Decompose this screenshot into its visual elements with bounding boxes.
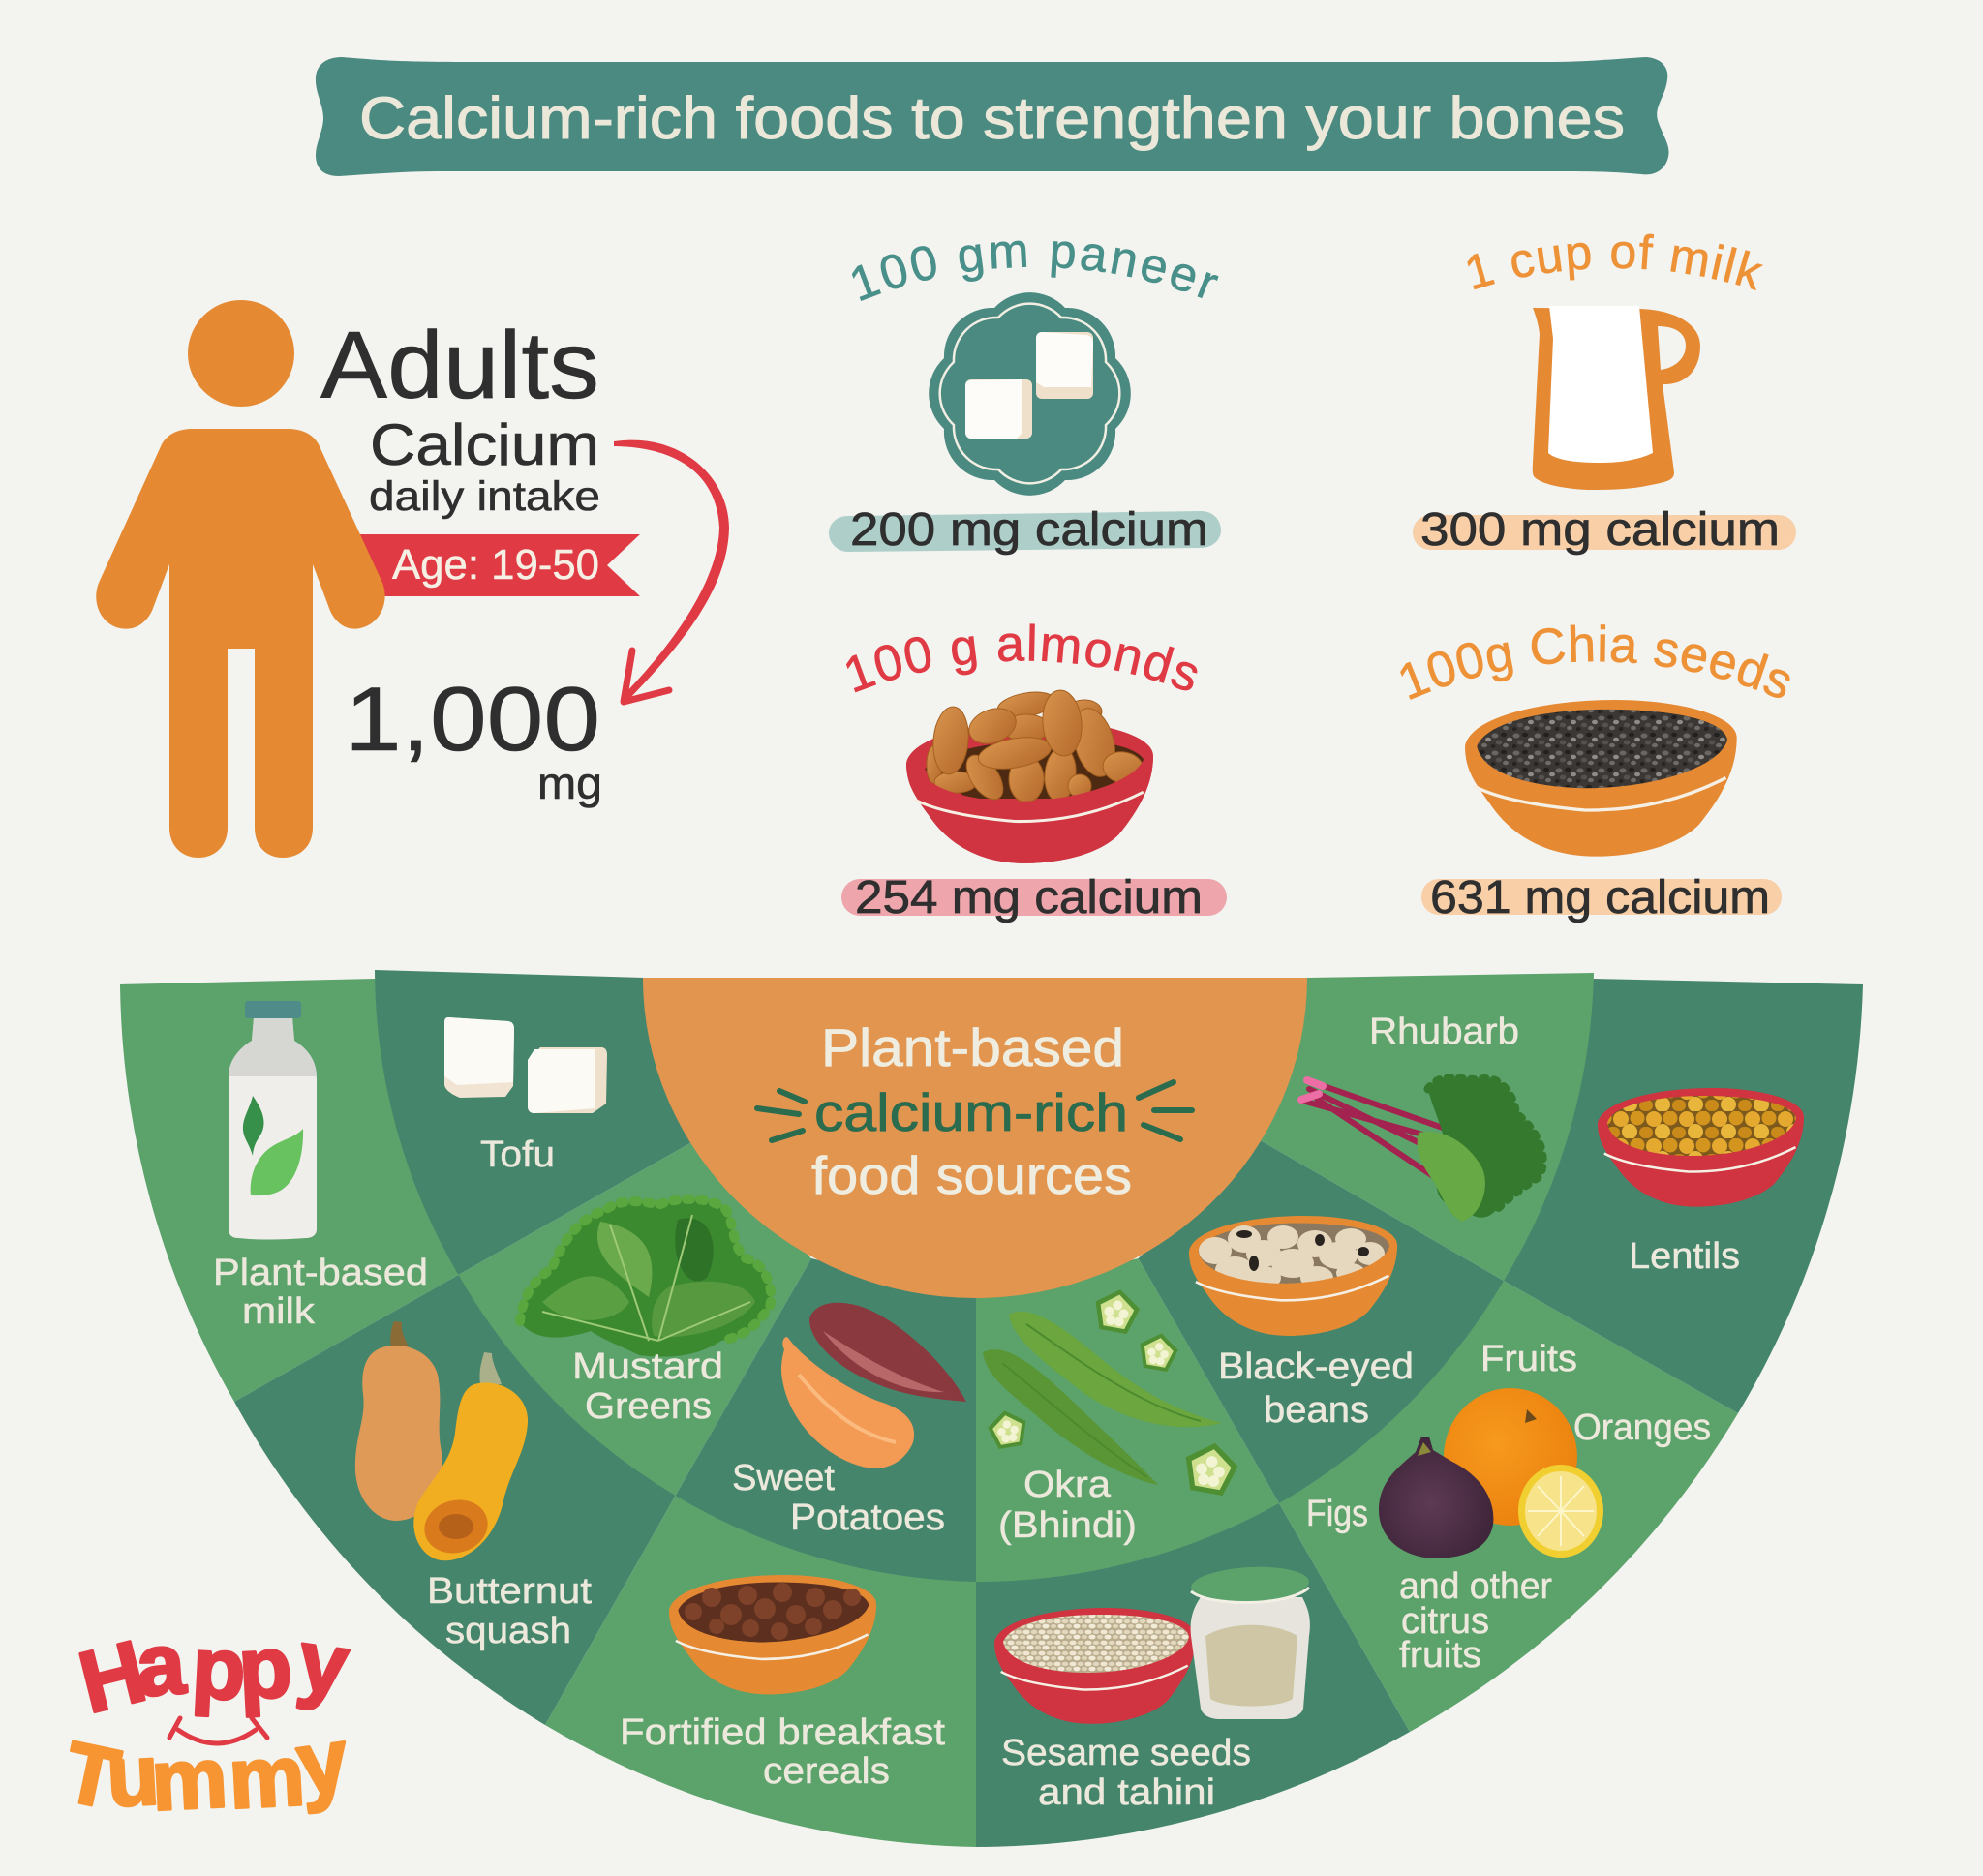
centre semicircle: food sources: [811, 1145, 1132, 1205]
arrow: [614, 440, 729, 702]
text: calcium: Calcium: [370, 412, 599, 477]
label: sweet potatoes: Potatoes: [790, 1498, 945, 1538]
icon: mustard greens: [520, 1199, 771, 1357]
logo word: tummy: m: [149, 1729, 229, 1829]
logo word: happy: y: [292, 1613, 354, 1715]
logo word: happy: a: [133, 1616, 189, 1715]
label: figs: Figs: [1306, 1494, 1368, 1534]
number: 1,000: 1,000: [345, 668, 600, 770]
label: butternut squash: Butternut: [427, 1571, 592, 1612]
label: fortified breakfast cereals: Fortified breakfast: [620, 1712, 945, 1753]
sector: tofu: [375, 970, 695, 1275]
label: mustard greens: Mustard: [572, 1346, 723, 1387]
label: and other citrus fruits: fruits: [1399, 1635, 1481, 1676]
label: lentils: Lentils: [1629, 1236, 1740, 1277]
icon: paneer plate: [929, 292, 1131, 496]
logo: happy tummy: [56, 1613, 354, 1829]
logo word: happy: p: [190, 1619, 248, 1719]
sector: butternut squash: [234, 1275, 676, 1725]
age ribbon: Age: 19-50: [392, 541, 599, 589]
sector: sweet potatoes: [676, 1258, 976, 1582]
curved label: 100 g almonds: [846, 623, 1197, 693]
label: fortified breakfast cereals: [620, 1712, 945, 1792]
logo word: tummy: T: [56, 1723, 127, 1828]
logo word: happy: H: [71, 1623, 155, 1732]
label: plant-based milk: Plant-based: [213, 1253, 428, 1293]
icon: butternut squash: [355, 1321, 528, 1560]
label: plant-based milk: [213, 1253, 428, 1332]
label: fruits: Fruits: [1480, 1339, 1577, 1379]
curved label: 1 cup of milk: [1467, 234, 1764, 290]
label: oranges: Oranges: [1573, 1407, 1711, 1448]
label: butternut squash: squash: [445, 1611, 571, 1651]
icon: bowl of cereal: [669, 1575, 876, 1694]
logo word: tummy: u: [105, 1726, 162, 1825]
icon: sweet potatoes: [781, 1303, 966, 1468]
label: sesame seeds and tahini: and tahini: [1038, 1772, 1215, 1813]
icon: bowl of black-eyed beans: [1189, 1216, 1397, 1336]
sector: black-eyed beans: [1139, 1140, 1504, 1503]
label: sweet potatoes: [732, 1458, 945, 1538]
unit: mg: mg: [537, 758, 602, 808]
sector: okra: [976, 1258, 1279, 1582]
icon: sesame seeds and tahini: [994, 1564, 1310, 1724]
icon: logo smile: [169, 1718, 267, 1743]
calcium pill: 631 mg calcium: [1430, 872, 1770, 923]
panel: paneer: [829, 240, 1221, 556]
icon: bowl of chia seeds: [1465, 700, 1737, 857]
adults daily intake panel: [96, 300, 729, 858]
label: butternut squash: [427, 1571, 592, 1651]
label: mustard greens: Greens: [585, 1386, 712, 1427]
sector: plant-based milk: [120, 979, 459, 1402]
label: and other citrus fruits: and other: [1399, 1566, 1552, 1607]
logo word: tummy: m: [227, 1727, 307, 1827]
age ribbon: [357, 534, 640, 596]
icon: tofu cubes: [444, 1017, 607, 1113]
logo word: happy: [71, 1613, 354, 1732]
logo word: tummy: [56, 1709, 354, 1829]
centre semicircle: [643, 978, 1307, 1298]
centre semicircle: Plant-based: [821, 1017, 1124, 1077]
sector: rhubarb: [1261, 973, 1594, 1281]
title banner: [316, 57, 1669, 176]
label: okra: [998, 1465, 1137, 1546]
calcium pill: 254 mg calcium: [855, 872, 1203, 923]
calcium pill: 200 mg calcium: [850, 504, 1208, 556]
centre semicircle: calcium-rich: [814, 1082, 1128, 1142]
sector: lentils: [1504, 979, 1863, 1413]
label: and other citrus fruits: [1399, 1566, 1552, 1676]
label: okra: (Bhindi): [998, 1505, 1137, 1546]
icon: plant-based milk bottle: [229, 1001, 317, 1239]
text paths for curved labels: [760, 267, 1865, 746]
icon: rhubarb: [1301, 1078, 1542, 1222]
sector: mustard greens: [459, 1140, 811, 1496]
label: sesame seeds and tahini: Sesame seeds: [1001, 1733, 1251, 1773]
icon: person: [96, 300, 385, 858]
label: sweet potatoes: Sweet: [732, 1458, 835, 1498]
sector: fruits: [1279, 1281, 1738, 1732]
curved label: 100 gm paneer: [852, 240, 1219, 301]
label: rhubarb: Rhubarb: [1369, 1012, 1519, 1052]
panel: almonds: [841, 623, 1227, 923]
icon: okra: [983, 1286, 1241, 1498]
curved label: 100g Chia seeds: [1400, 624, 1789, 700]
sector: fortified cereals: [545, 1496, 976, 1847]
text: daily intake: daily intake: [369, 473, 600, 520]
label: plant-based milk: milk: [242, 1291, 316, 1332]
label: black-eyed beans: [1218, 1346, 1414, 1431]
label: fortified breakfast cereals: cereals: [763, 1751, 890, 1792]
icon: milk jug: [1533, 306, 1700, 490]
panel: milk: [1413, 234, 1796, 556]
label: and other citrus fruits: citrus: [1401, 1601, 1489, 1642]
calcium pill: 300 mg calcium: [1420, 504, 1780, 556]
sector: sesame seeds and tahini: [976, 1503, 1410, 1847]
label: black-eyed beans: beans: [1264, 1390, 1369, 1431]
logo word: tummy: y: [290, 1709, 354, 1815]
chart: plant-based food wheel: [120, 970, 1863, 1847]
label: okra: Okra: [1023, 1465, 1112, 1505]
icon: bowl of almonds: [906, 688, 1153, 863]
icon: bowl of lentils: [1598, 1088, 1804, 1207]
panel: chia seeds: [1400, 624, 1789, 923]
icon: fruits: [1379, 1388, 1603, 1558]
title banner: Calcium-rich foods to strengthen your bones: [359, 85, 1625, 151]
label: tofu: Tofu: [480, 1135, 555, 1175]
logo word: happy: p: [236, 1619, 294, 1718]
label: black-eyed beans: Black-eyed: [1218, 1346, 1414, 1387]
label: sesame seeds and tahini: [1001, 1733, 1251, 1813]
heading: adults: Adults: [320, 312, 599, 418]
label: mustard greens: [572, 1346, 723, 1427]
